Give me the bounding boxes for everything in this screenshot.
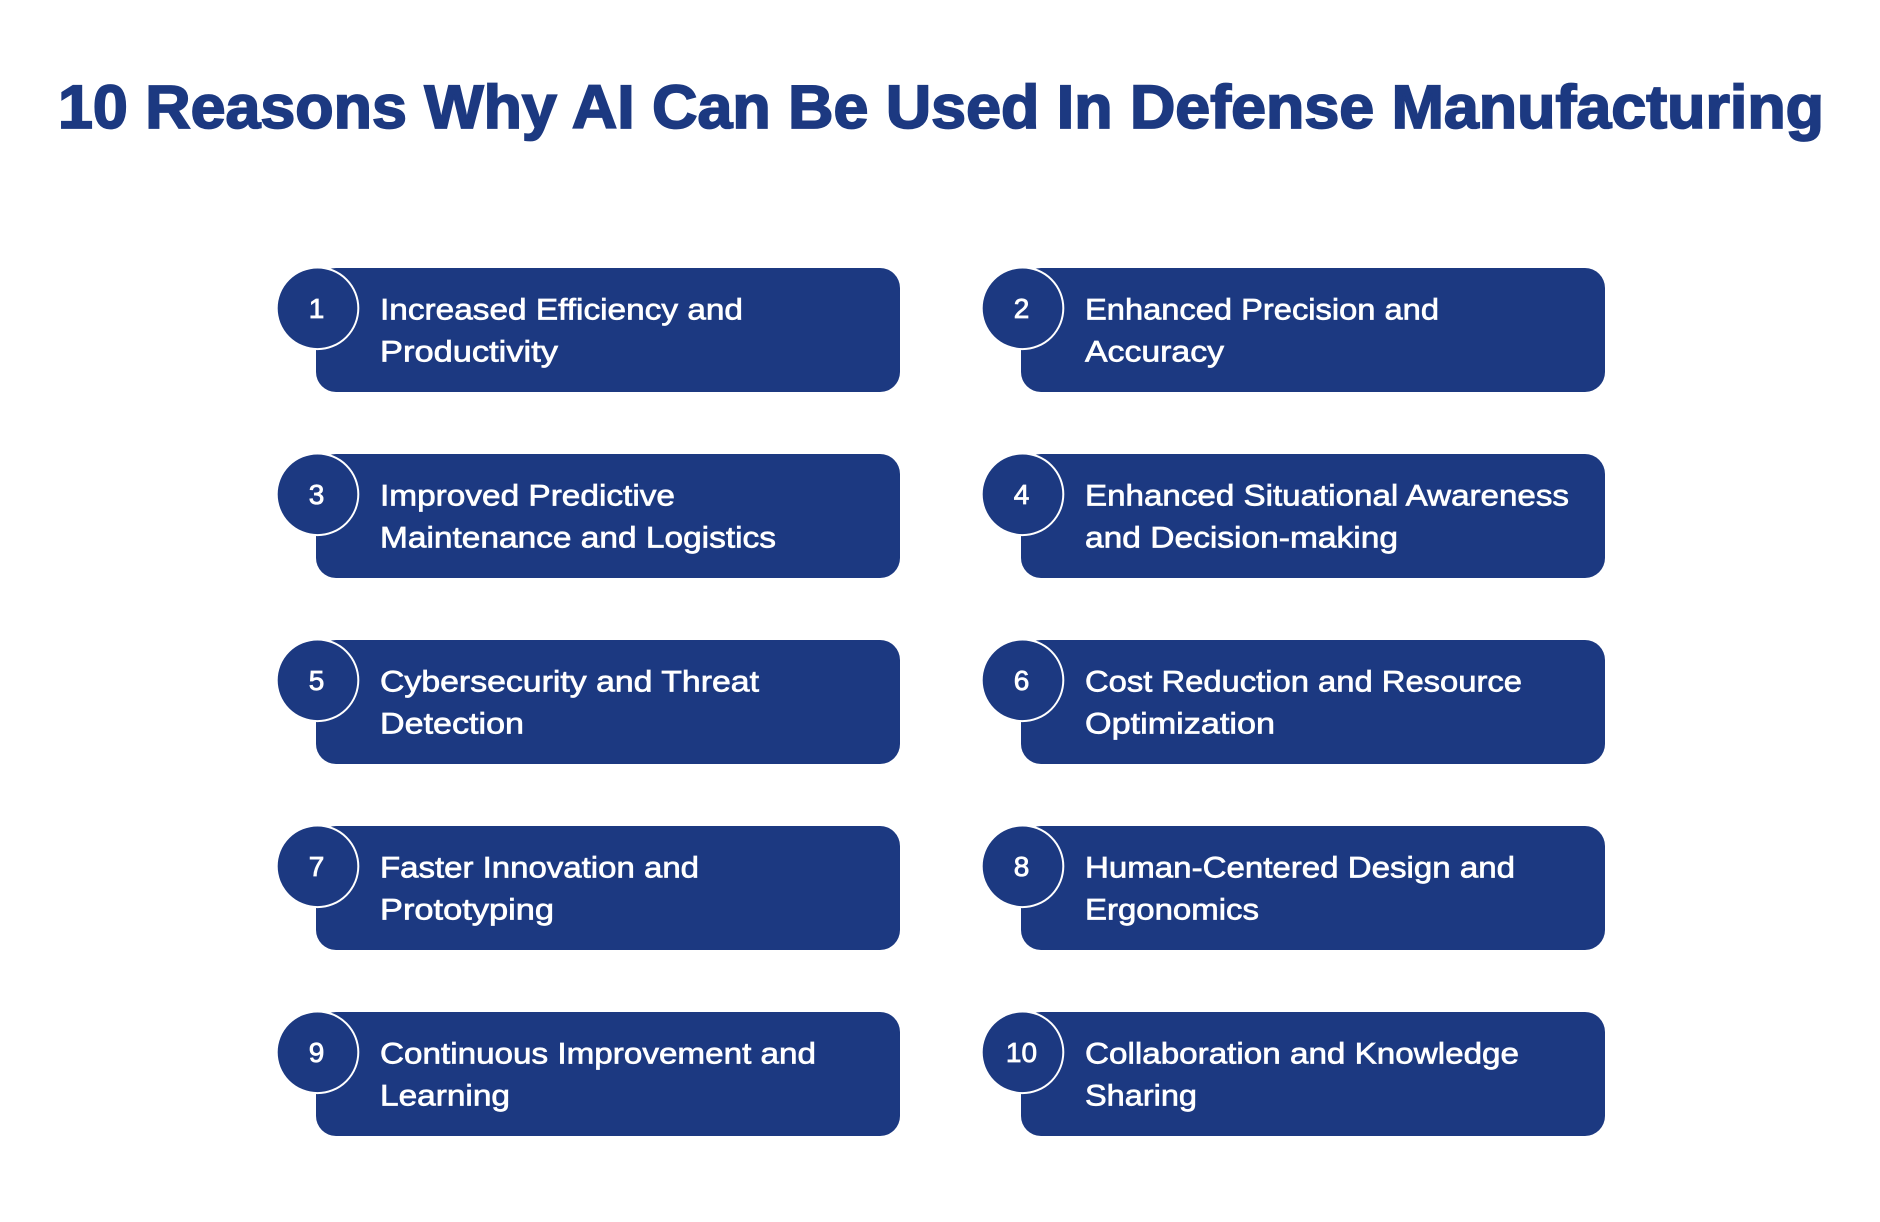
panel: reason 1 <box>277 268 900 392</box>
card background 2 <box>1021 268 1605 392</box>
label 4: and Decision-making <box>1085 522 1398 554</box>
label 4: Enhanced Situational Awareness <box>1085 480 1569 512</box>
number badge 7: 7 <box>309 851 324 882</box>
card background 4 <box>1021 454 1605 578</box>
label 10 <box>1085 1038 1519 1112</box>
label 3: Maintenance and Logistics <box>380 522 776 554</box>
panel: reason 4 <box>982 454 1605 578</box>
label 1 <box>380 294 743 368</box>
number badge 9 <box>277 1012 358 1093</box>
card background 6 <box>1021 640 1605 764</box>
label 5: Detection <box>380 708 524 740</box>
label 5 <box>380 666 760 740</box>
label 9 <box>380 1038 816 1112</box>
number badge 8 <box>982 826 1063 907</box>
title: 10 Reasons Why AI Can Be Used In Defense Manufacturing <box>58 73 1824 141</box>
number badge 4: 4 <box>1014 479 1029 510</box>
number badge 5 <box>277 640 358 721</box>
label 7: Faster Innovation and <box>380 852 699 884</box>
card background 7 <box>316 826 900 950</box>
label 1: Increased Efficiency and <box>380 294 743 326</box>
label 2: Enhanced Precision and <box>1085 294 1439 326</box>
panel: reason 2 <box>982 268 1605 392</box>
number badge 6: 6 <box>1014 665 1029 696</box>
panel: reason 6 <box>982 640 1605 764</box>
label 9: Learning <box>380 1080 510 1112</box>
number badge 3: 3 <box>309 479 324 510</box>
label 7 <box>380 852 699 926</box>
label 6: Cost Reduction and Resource <box>1085 666 1522 698</box>
panel: reason 3 <box>277 454 900 578</box>
card background 3 <box>316 454 900 578</box>
number badge 2 <box>982 268 1063 349</box>
card background 5 <box>316 640 900 764</box>
label 8: Human-Centered Design and <box>1085 852 1515 884</box>
number badge 2: 2 <box>1014 293 1029 324</box>
number badge 1: 1 <box>309 293 324 324</box>
panel: reason 8 <box>982 826 1605 950</box>
number badge 6 <box>982 640 1063 721</box>
label 8: Ergonomics <box>1085 894 1259 926</box>
panel: reason 7 <box>277 826 900 950</box>
label 2: Accuracy <box>1085 336 1224 368</box>
panel: reason 9 <box>277 1012 900 1136</box>
label 2 <box>1085 294 1439 368</box>
number badge 10: 10 <box>1006 1037 1037 1068</box>
label 10: Collaboration and Knowledge <box>1085 1038 1519 1070</box>
label 7: Prototyping <box>380 894 554 926</box>
label 9: Continuous Improvement and <box>380 1038 816 1070</box>
number badge 7 <box>277 826 358 907</box>
number badge 3 <box>277 454 358 535</box>
label 1: Productivity <box>380 336 558 368</box>
number badge 10 <box>982 1012 1063 1093</box>
number badge 8: 8 <box>1014 851 1029 882</box>
label 6 <box>1085 666 1522 740</box>
number badge 4 <box>982 454 1063 535</box>
panel: reason 5 <box>277 640 900 764</box>
card background 10 <box>1021 1012 1605 1136</box>
number badge 9: 9 <box>309 1037 324 1068</box>
card background 8 <box>1021 826 1605 950</box>
card background 1 <box>316 268 900 392</box>
panel: reason 10 <box>982 1012 1605 1136</box>
label 3: Improved Predictive <box>380 480 675 512</box>
label 4 <box>1085 480 1569 554</box>
label 10: Sharing <box>1085 1080 1197 1112</box>
label 6: Optimization <box>1085 708 1275 740</box>
card background 9 <box>316 1012 900 1136</box>
number badge 5: 5 <box>309 665 324 696</box>
label 5: Cybersecurity and Threat <box>380 666 760 698</box>
number badge 1 <box>277 268 358 349</box>
label 8 <box>1085 852 1515 926</box>
label 3 <box>380 480 776 554</box>
